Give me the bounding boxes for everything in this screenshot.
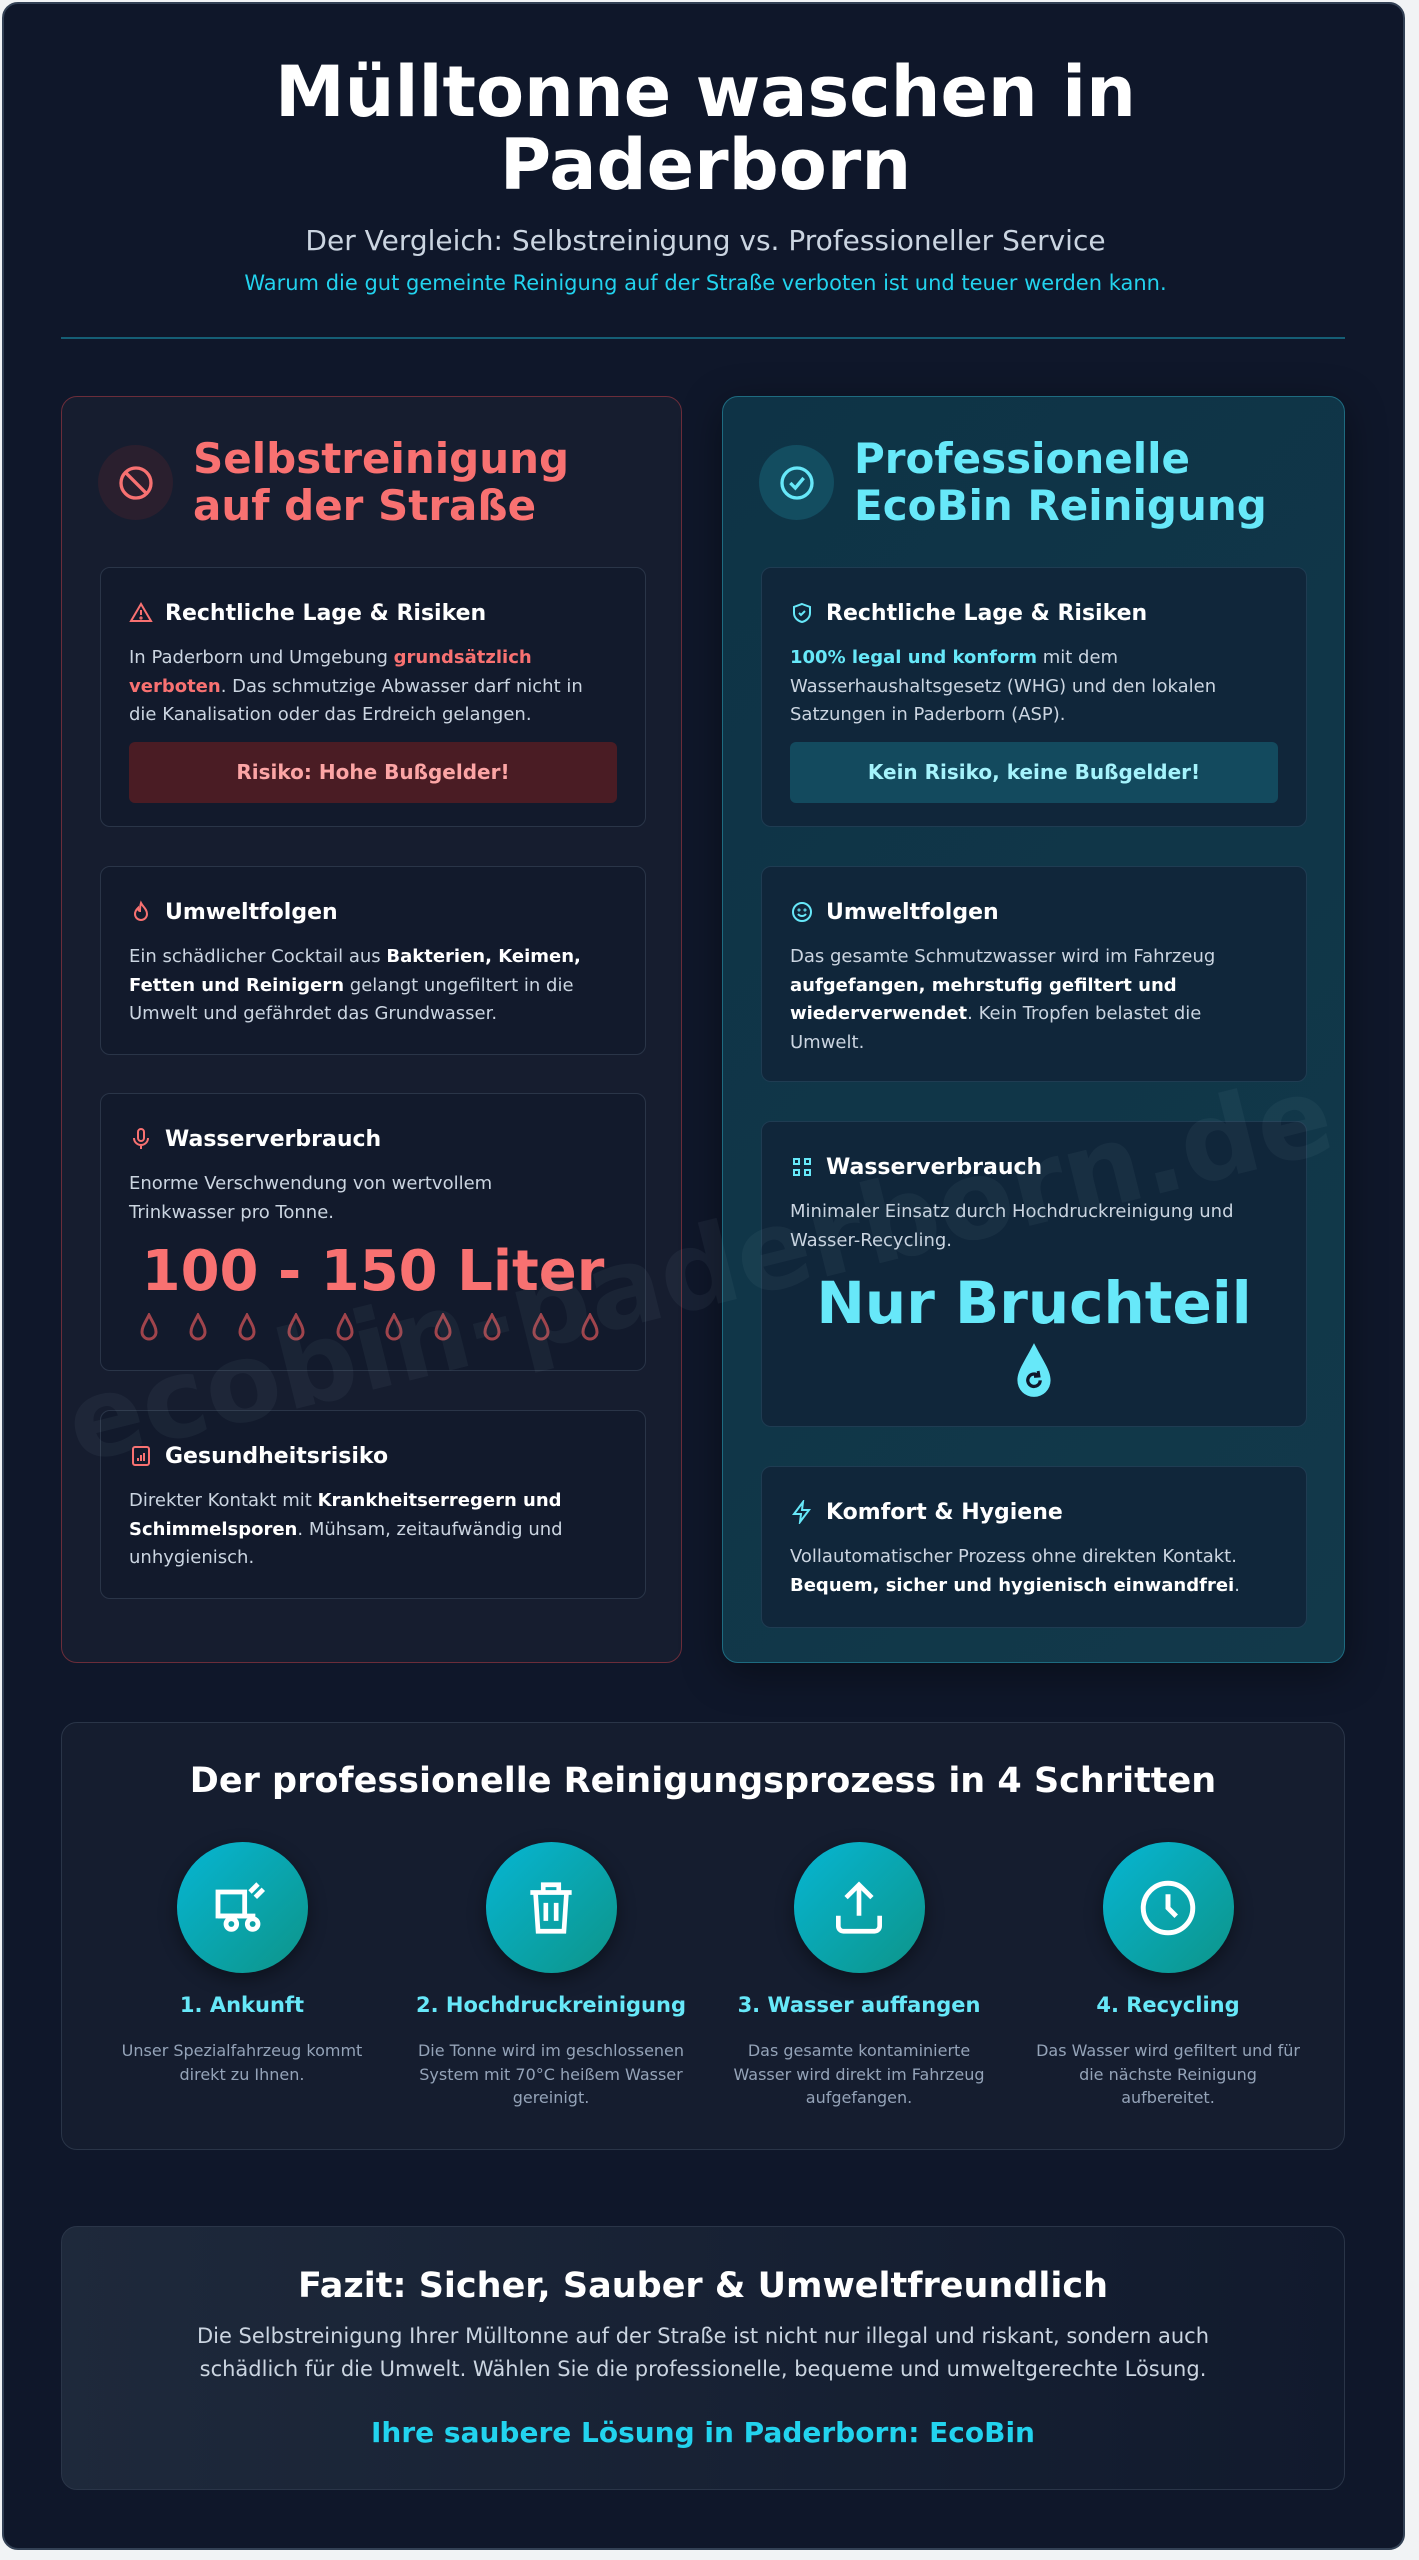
- title: [275, 51, 1136, 206]
- fazit body: Die Selbstreinigung Ihrer Mülltonne auf der Straße ist nicht nur illegal und riskant, sondern auch: [197, 2324, 1209, 2348]
- card: gesundheitsrisiko left: [100, 1410, 646, 1599]
- card: umweltfolgen right: [761, 866, 1307, 1082]
- card: wasserverbrauch left: [100, 1093, 646, 1371]
- process title: Der professionelle Reinigungsprozess in 4 Schritten: [190, 1761, 1216, 1801]
- no-risk box: [790, 742, 1278, 803]
- card: umweltfolgen left: [100, 866, 646, 1055]
- watermark: ecobin-paderborn.de: [54, 1050, 1345, 1488]
- step 2: System mit 70°C heißem Wasser: [419, 2064, 683, 2084]
- step 3: [733, 1842, 985, 2107]
- fazit body: schädlich für die Umwelt. Wählen Sie die professionelle, bequeme und umweltgerechte Lösung.: [200, 2357, 1206, 2381]
- drops row: [140, 1313, 598, 1340]
- panel: fazit: [61, 2226, 1345, 2490]
- icon: recycle drop: [1017, 1343, 1051, 1397]
- title: Paderborn: [500, 124, 911, 206]
- icon: prohibited: [98, 445, 173, 520]
- fazit title: Fazit: Sicher, Sauber & Umweltfreundlich: [298, 2266, 1108, 2306]
- card: komfort: Vollautomatischer Prozess ohne direkten Kontakt. Bequem, sicher und hygienisch einwandfrei.: [790, 1546, 1240, 1596]
- step 3: aufgefangen.: [806, 2088, 912, 2107]
- panel: Selbstreinigung: [61, 396, 682, 1663]
- card: wasserverbrauch right: [761, 1121, 1307, 1427]
- subtitle: Der Vergleich: Selbstreinigung vs. Professioneller Service: [305, 224, 1106, 257]
- card: rechtliche lage left: [100, 567, 646, 827]
- card: gesundheitsrisiko left: Gesundheitsrisiko: [165, 1444, 388, 1468]
- card: umweltfolgen left: Umweltfolgen: [165, 900, 338, 924]
- card: rechtliche lage right: [761, 567, 1307, 827]
- card: wasserverbrauch left: Enorme Verschwendung von wertvollem Trinkwasser pro Tonne.: [129, 1173, 492, 1223]
- card: rechtliche lage left: In Paderborn und Umgebung grundsätzlich verboten. Das schmutzige Abwasser darf nicht in die Kanalisation oder das Erdreich gelangen.: [129, 647, 583, 725]
- card: rechtliche lage right: Rechtliche Lage & Risiken: [826, 600, 1147, 626]
- heading: auf der Straße: [193, 481, 536, 530]
- heading: EcoBin Reinigung: [854, 481, 1267, 530]
- heading: [193, 434, 569, 530]
- card: wasserverbrauch right: Minimaler Einsatz durch Hochdruckreinigung und Wasser-Recycling.: [790, 1201, 1234, 1251]
- heading: [854, 434, 1267, 530]
- step 2: [416, 1842, 686, 2107]
- card: wasserverbrauch left: Wasserverbrauch: [165, 1126, 381, 1152]
- risk box: [129, 742, 617, 803]
- card: komfort: Komfort & Hygiene: [826, 1500, 1063, 1524]
- title: Mülltonne waschen in: [275, 51, 1136, 133]
- heading: Selbstreinigung: [193, 434, 569, 483]
- fazit body: [197, 2324, 1209, 2381]
- step 4: 4. Recycling: [1096, 1993, 1240, 2017]
- card: komfort: [761, 1466, 1307, 1628]
- card: umweltfolgen left: Ein schädlicher Cocktail aus Bakterien, Keimen, Fetten und Reinigern gelangt ungefiltert in die Umwelt und gefährdet das Grundwasser.: [129, 946, 581, 1024]
- panel: process: [61, 1722, 1345, 2150]
- panel: Professionelle EcoBin: [722, 396, 1345, 1663]
- icon: check: [759, 445, 834, 520]
- card: umweltfolgen right: Das gesamte Schmutzwasser wird im Fahrzeug aufgefangen, mehrstufig gefiltert und wiederverwendet. Kein Tropfen belastet die Umwelt.: [790, 946, 1215, 1053]
- step 4: [1036, 1842, 1300, 2107]
- step 1: [122, 1842, 362, 2084]
- card: rechtliche lage left: Rechtliche Lage & Risiken: [165, 600, 486, 626]
- step 4: Das Wasser wird gefiltert und für: [1036, 2041, 1300, 2060]
- tagline: Warum die gut gemeinte Reinigung auf der Straße verboten ist und teuer werden kann.: [244, 271, 1167, 295]
- no-risk box: Kein Risiko, keine Bußgelder!: [868, 760, 1200, 784]
- card: wasserverbrauch right: Wasserverbrauch: [826, 1154, 1042, 1180]
- card: umweltfolgen right: Umweltfolgen: [826, 900, 999, 924]
- step 4: die nächste Reinigung: [1079, 2064, 1257, 2084]
- big number: 100 - 150 Liter: [142, 1239, 604, 1304]
- step 2: Die Tonne wird im geschlossenen: [418, 2041, 684, 2060]
- step 4: aufbereitet.: [1121, 2088, 1215, 2107]
- step 1: 1. Ankunft: [180, 1993, 304, 2017]
- step 3: Wasser wird direkt im Fahrzeug: [733, 2064, 985, 2084]
- big text: Nur Bruchteil: [816, 1269, 1252, 1337]
- step 1: Unser Spezialfahrzeug kommt: [122, 2041, 362, 2060]
- step 2: 2. Hochdruckreinigung: [416, 1993, 686, 2017]
- card: rechtliche lage right: 100% legal und konform mit dem Wasserhaushaltsgesetz (WHG) und den lokalen Satzungen in Paderborn (ASP).: [790, 647, 1216, 725]
- heading: Professionelle: [854, 434, 1190, 483]
- risk box: Risiko: Hohe Bußgelder!: [236, 760, 510, 784]
- step 1: direkt zu Ihnen.: [180, 2064, 304, 2084]
- card: gesundheitsrisiko left: Direkter Kontakt mit Krankheitserregern und Schimmelsporen. Mühsam, zeitaufwändig und unhygienisch.: [129, 1490, 563, 1568]
- step 3: Das gesamte kontaminierte: [748, 2041, 970, 2060]
- step 3: 3. Wasser auffangen: [738, 1993, 980, 2017]
- call to action: Ihre saubere Lösung in Paderborn: EcoBin: [371, 2416, 1035, 2449]
- step 2: gereinigt.: [513, 2088, 589, 2107]
